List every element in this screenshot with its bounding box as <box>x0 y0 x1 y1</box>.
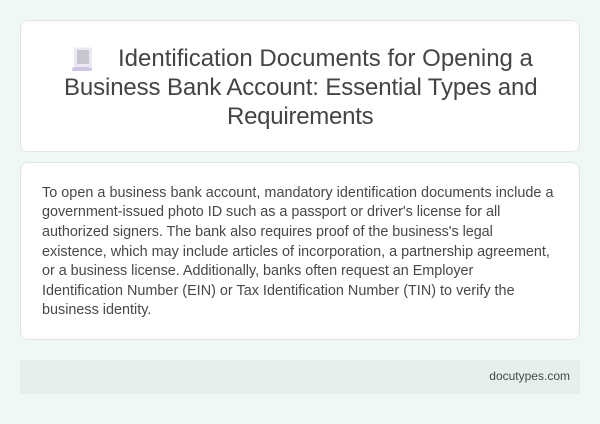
title: Identification Documents for Opening a <box>118 45 533 72</box>
title: Requirements <box>227 103 373 130</box>
header panel <box>20 20 580 152</box>
description text: Identification Number (EIN) or Tax Identification Number (TIN) to verify the <box>42 283 515 299</box>
title: Business Bank Account: Essential Types and <box>64 74 537 101</box>
footer source text: docutypes.com <box>489 369 570 383</box>
icon: document <box>72 47 92 71</box>
description text: To open a business bank account, mandatory identification documents include a <box>42 185 554 201</box>
description text: or a business license. Additionally, banks often request an Employer <box>42 263 473 279</box>
description text: government-issued photo ID such as a passport or driver's license for all <box>42 204 500 220</box>
description text: business identity. <box>42 302 151 318</box>
description text <box>42 185 554 318</box>
description text: authorized signers. The bank also requires proof of the business's legal <box>42 224 493 240</box>
title <box>64 45 537 130</box>
description panel <box>20 162 580 340</box>
footer bar <box>20 360 580 394</box>
description text: existence, which may include articles of incorporation, a partnership agreement, <box>42 244 550 260</box>
